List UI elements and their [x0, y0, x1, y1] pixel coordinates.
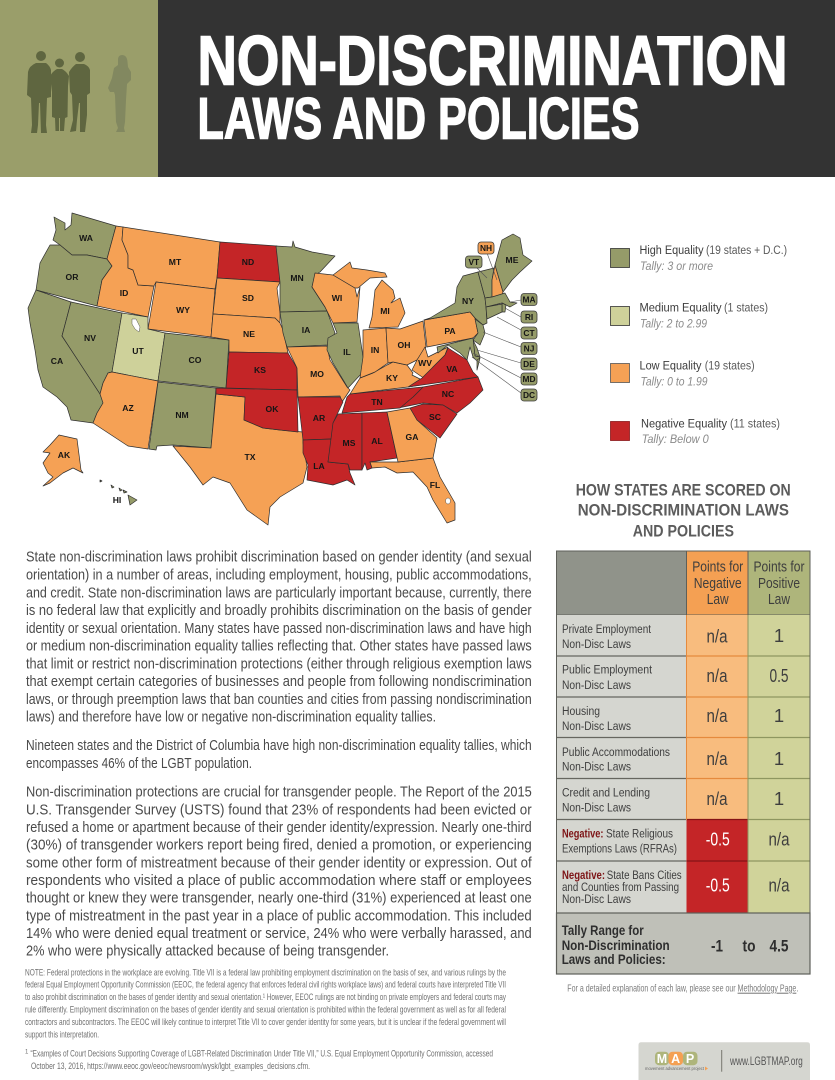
legend: high equality: Tally: 3 or more	[640, 259, 713, 273]
legend: medium equality: Medium Equality	[640, 301, 722, 315]
state labels: AR	[313, 413, 326, 423]
row: housing: 1	[774, 705, 784, 726]
paragraph 3	[26, 785, 533, 960]
row: credit and lending: 1	[774, 788, 784, 809]
state labels: CO	[189, 355, 202, 365]
paragraph 1: that exempt certain categories of businesses and people from following nondiscrimination	[26, 674, 532, 690]
state labels: UT	[132, 346, 144, 356]
northeast state callouts: DE	[523, 359, 535, 369]
paragraph 1: or medium non-discrimination equality tallies reflecting that. Other states have passed laws	[26, 639, 532, 655]
row: public employment: n/a	[706, 665, 728, 686]
northeast state callouts: MA	[522, 294, 536, 304]
table outline	[556, 551, 810, 974]
row: housing: Non-Disc Laws	[562, 719, 631, 733]
table header row	[556, 551, 810, 615]
state labels: ME	[506, 255, 519, 265]
table header row: Law	[707, 592, 729, 608]
state labels: PA	[444, 326, 456, 336]
note text: support this interpretation.	[25, 1029, 99, 1039]
northeast state callouts	[466, 242, 537, 401]
state labels: NV	[84, 333, 96, 343]
row: religious exemptions: Exemptions Laws (RFRAs)	[562, 842, 677, 856]
leader lines	[472, 253, 521, 393]
row: housing	[562, 704, 784, 733]
paragraph 3: (30%) of transgender workers report being fired, denied a promotion, or experiencing	[26, 838, 532, 854]
paragraph 1: identity or sexual orientation. Many states have passed non-discrimination laws and have high	[26, 621, 532, 637]
row: state bans: Negative:	[562, 868, 605, 882]
row: housing: n/a	[706, 705, 728, 726]
row: credit and lending: Non-Disc Laws	[562, 801, 631, 815]
state labels: LA	[313, 461, 325, 471]
row: housing: Housing	[562, 704, 600, 718]
website: www.LGBTMAP.org	[729, 1054, 803, 1068]
legend: negative equality: (11 states)	[730, 416, 780, 430]
paragraph 1: and credit. State non-discrimination laws are particularly important because, currently, there	[26, 585, 532, 601]
state labels: NY	[462, 296, 474, 306]
state labels: KY	[386, 373, 398, 383]
state labels: OH	[398, 340, 410, 350]
row: credit and lending	[562, 786, 784, 815]
paragraph 1: laws, or through preemption laws that ban counties and cities from passing nondiscrimination	[26, 692, 532, 708]
row: religious exemptions: n/a	[768, 829, 790, 850]
row: credit and lending: Credit and Lending	[562, 786, 650, 800]
note text: rule differently. Employment discrimination on the bases of gender identity and sexual orientation is prohibited within the federal government as well as for all federal	[25, 1005, 506, 1015]
state labels: MI	[380, 306, 390, 316]
state labels: IN	[371, 345, 379, 355]
state labels: WV	[418, 358, 432, 368]
title: LAWS AND POLICIES	[198, 86, 640, 152]
icon: woman silhouette	[108, 55, 131, 132]
table header row: Positive	[758, 576, 800, 592]
US map	[28, 213, 537, 525]
logo: MAP	[645, 1052, 708, 1071]
row: private employment: Non-Disc Laws	[562, 637, 631, 651]
row: state bans: Non-Disc Laws	[562, 892, 631, 906]
state labels: AZ	[122, 403, 134, 413]
legend: low equality	[610, 358, 755, 389]
paragraph 3: type of mistreatment in the past year in a place of public accommodation. This included	[26, 908, 532, 924]
row: public accommodations: 1	[774, 748, 784, 769]
icon: family silhouettes	[27, 51, 90, 133]
state labels: TN	[371, 397, 383, 407]
row: public accommodations	[562, 745, 784, 774]
row: tally range: 4.5	[770, 938, 788, 956]
row: public accommodations: Public Accommodations	[562, 745, 670, 759]
row: credit and lending: n/a	[706, 788, 728, 809]
state labels: OK	[266, 404, 279, 414]
legend: negative equality: Negative Equality	[641, 416, 728, 430]
state shapes	[28, 213, 532, 525]
legend	[610, 243, 787, 446]
state labels: MO	[310, 369, 324, 379]
state labels: SC	[429, 412, 441, 422]
row: private employment: Private Employment	[562, 622, 651, 636]
legend: negative equality: Tally: Below 0	[642, 432, 709, 446]
paragraph 3: thought or knew they were transgender, nearly one-third (31%) experienced at least one	[26, 891, 532, 907]
legend: high equality: High Equality	[640, 243, 704, 257]
footnote: “Examples of Court Decisions Supporting Coverage of LGBT-Related Discrimination Under Title VII,” U.S. Equal Employment Opportunity Commission, accessed	[30, 1049, 493, 1059]
northeast state callouts: VT	[468, 257, 480, 267]
paragraph 1	[26, 550, 532, 726]
legend: medium equality: (1 states)	[724, 301, 768, 315]
paragraph 1: orientation) in a number of areas, including employment, housing, public accommodations,	[26, 568, 532, 584]
state labels: AK	[58, 450, 71, 460]
paragraph 3: 14% who were denied equal treatment or service, 24% who were verbally harassed, and	[26, 926, 532, 942]
state labels: MT	[169, 257, 182, 267]
row: private employment	[562, 622, 784, 651]
legend: medium equality: Tally: 2 to 2.99	[640, 317, 707, 331]
heading: how states are scored: HOW STATES ARE SCORED ON	[576, 482, 791, 500]
footnote: October 13, 2016, https://www.eeoc.gov/eeoc/newsroom/wysk/lgbt_examples_decisions.cfm.	[31, 1061, 310, 1071]
state labels: HI	[113, 495, 121, 505]
heading: how states are scored	[576, 482, 791, 541]
paragraph 1: laws) and therefore have low or negative non-discrimination equality tallies.	[26, 710, 436, 726]
note text: contractors and subcontractors. The EEOC will likely continue to interpret Title VII to cover gender identity for some years, but it is unclear if the federal government will	[25, 1017, 506, 1027]
state labels: NM	[175, 410, 189, 420]
row: state bans: State Bans Cities	[607, 868, 682, 882]
state labels: NC	[442, 389, 454, 399]
state labels: WI	[332, 293, 342, 303]
row: public employment	[562, 662, 788, 692]
title	[198, 22, 788, 152]
paragraph 3: U.S. Transgender Survey (USTS) found that 23% of respondents had been evicted or	[26, 802, 532, 818]
paragraph 2: Nineteen states and the District of Columbia have high non-discrimination equality tallies, which	[26, 738, 532, 754]
state labels: MN	[290, 273, 304, 283]
row: public employment: 0.5	[770, 665, 788, 686]
northeast state callouts: NH	[480, 243, 492, 253]
note text	[25, 967, 506, 1039]
row: tally range: -1	[711, 938, 723, 956]
table row backgrounds	[556, 615, 810, 913]
row: state bans: n/a	[768, 875, 790, 896]
row: state bans: -0.5	[706, 875, 730, 896]
state labels: NE	[243, 329, 255, 339]
legend: low equality: (19 states)	[705, 358, 755, 372]
state labels: ND	[242, 257, 254, 267]
row: religious exemptions: State Religious	[606, 827, 673, 841]
logo: MAP: P	[686, 1052, 694, 1066]
footer logo badge	[638, 1042, 810, 1080]
state labels: WY	[176, 305, 190, 315]
state labels: TX	[245, 452, 256, 462]
table header row: Points for	[692, 560, 743, 576]
state labels: CA	[51, 356, 63, 366]
paragraph 3: 2% who were physically attacked because of being transgender.	[26, 944, 389, 960]
lakes	[132, 319, 450, 504]
paragraph 1: State non-discrimination laws prohibit discrimination based on gender identity (and sexual	[26, 550, 532, 566]
state labels: FL	[430, 480, 440, 490]
state labels: IA	[302, 325, 310, 335]
paragraph 3: respondents who visited a place of public accommodation where staff or employees	[26, 873, 532, 889]
logo: MAP: movement advancement project	[645, 1066, 705, 1071]
row: private employment: 1	[774, 625, 784, 646]
state labels: ID	[120, 288, 128, 298]
paragraph 1: is no federal law that explicitly and broadly prohibits discrimination on the basis of gender	[26, 603, 532, 619]
row: state bans: and Counties from Passing	[562, 880, 679, 894]
state labels: AL	[371, 436, 383, 446]
body text	[26, 550, 533, 960]
scoring table	[556, 551, 810, 974]
legend: medium equality	[610, 301, 768, 331]
row: religious exemptions: Negative:	[562, 827, 604, 841]
paragraph 3: some other form of mistreatment because of their gender identity or expression. Out of	[26, 855, 533, 871]
northeast state callouts: MD	[522, 374, 536, 384]
legend: high equality: (19 states + D.C.)	[706, 243, 787, 257]
table header row: Negative	[694, 576, 742, 592]
paragraph 2	[26, 738, 532, 772]
northeast state callouts: RI	[525, 312, 533, 322]
footnote: 1	[25, 1050, 29, 1056]
paragraph 1: that limit or restrict non-discrimination protections (either through religious exemption laws	[26, 656, 532, 672]
paragraph 2: encompasses 46% of the LGBT population.	[26, 756, 252, 772]
row: religious exemptions: -0.5	[706, 829, 730, 850]
logo: MAP: A	[671, 1052, 680, 1066]
heading: how states are scored: AND POLICIES	[633, 523, 734, 541]
northeast state callouts: DC	[523, 390, 535, 400]
state labels: MS	[343, 438, 356, 448]
row: private employment: n/a	[706, 625, 728, 646]
state labels: VA	[446, 364, 458, 374]
footnote	[25, 1049, 493, 1071]
note text: to also prohibit discrimination on the bases of gender identity and sexual orientation.¹ However, EEOC rulings are not binding on private employers and federal courts may	[25, 992, 506, 1002]
note text: NOTE: Federal protections in the workplace are evolving. Title VII is a federal law prohibiting employment discrimination on the basis of sex, and various rulings by the	[25, 967, 506, 977]
row: public employment: Public Employment	[562, 662, 652, 676]
methodology note: For a detailed explanation of each law, please see our Methodology Page.	[567, 983, 798, 995]
row: religious exemptions	[562, 827, 790, 856]
state labels: IL	[343, 347, 351, 357]
state labels: WA	[79, 233, 93, 243]
state labels: GA	[406, 432, 418, 442]
state labels: KS	[254, 365, 266, 375]
row: tally range: to	[742, 938, 756, 956]
legend: negative equality	[610, 416, 780, 446]
legend: low equality: Low Equality	[640, 358, 702, 372]
row: tally range	[556, 913, 810, 974]
table header row: Law	[768, 592, 791, 608]
legend: high equality	[610, 243, 787, 273]
northeast state callouts: CT	[523, 328, 535, 338]
row: public accommodations: n/a	[706, 748, 728, 769]
table header row: Points for	[754, 560, 805, 576]
logo: MAP: M	[657, 1052, 667, 1066]
row: public employment: Non-Disc Laws	[562, 678, 631, 692]
row: tally range: Non-Discrimination	[562, 938, 670, 953]
state labels: OR	[66, 272, 79, 282]
state labels	[51, 233, 519, 505]
legend: low equality: Tally: 0 to 1.99	[640, 375, 708, 389]
northeast state callouts: NJ	[524, 344, 535, 354]
note text: federal Equal Employment Opportunity Commission (EEOC, the federal agency that enforces federal civil rights workplace laws) and federal courts have interpreted Title VII	[25, 980, 506, 990]
row: tally range: Tally Range for	[562, 923, 644, 938]
row: public accommodations: Non-Disc Laws	[562, 760, 631, 774]
paragraph 3: Non-discrimination protections are crucial for transgender people. The Report of the 2015	[26, 785, 532, 801]
heading: how states are scored: NON-DISCRIMINATION LAWS	[578, 502, 789, 520]
paragraph 3: refused a home or apartment because of their gender identity/expression. Nearly one-third	[26, 820, 532, 836]
state labels: SD	[242, 293, 254, 303]
header banner	[0, 0, 835, 177]
row: state bans	[562, 868, 790, 906]
row: tally range: Laws and Policies:	[562, 952, 666, 967]
